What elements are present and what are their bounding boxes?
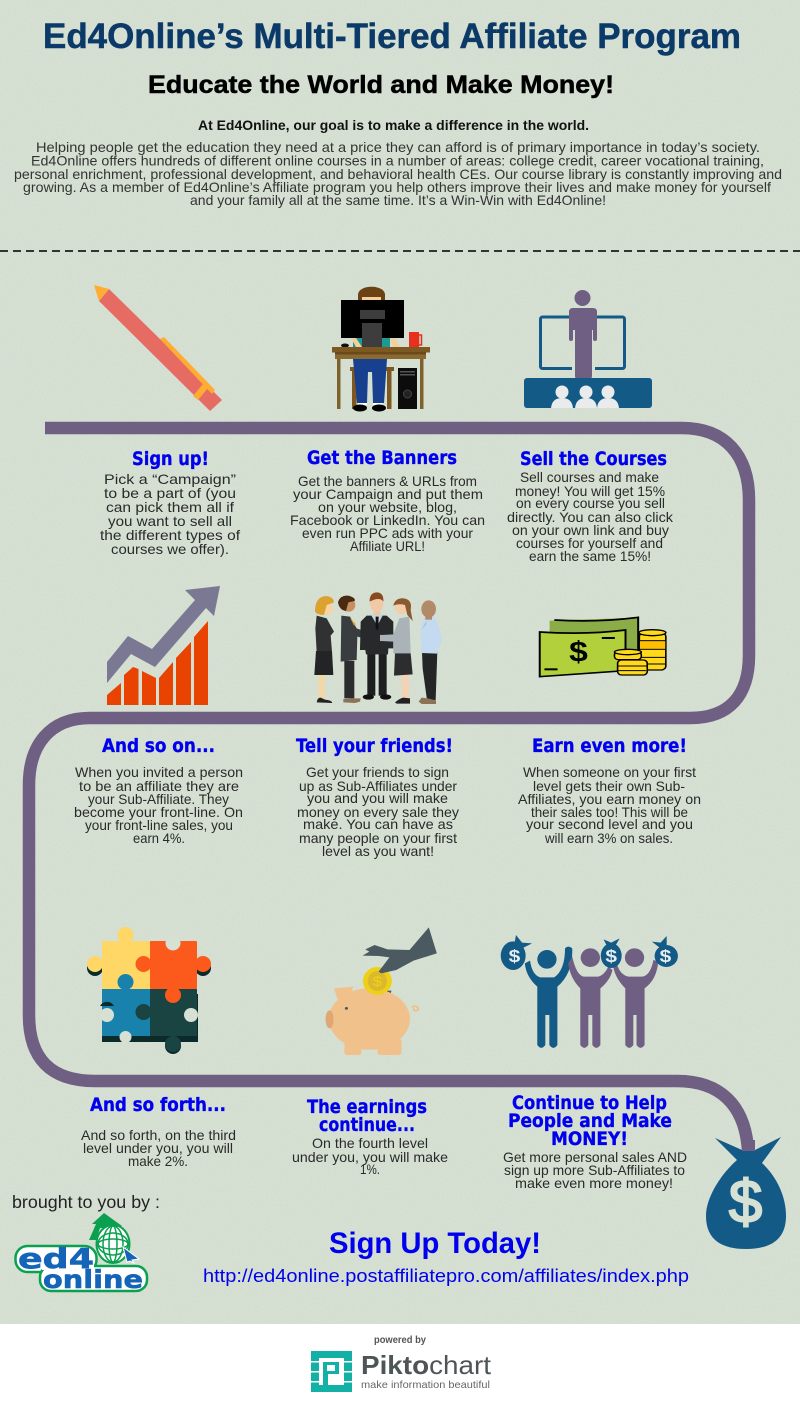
icon: rising bar chart with arrow: [107, 586, 220, 705]
tagline: At Ed4Online, our goal is to make a difference in the world.: [198, 118, 589, 133]
text block: earn even more: will earn 3% on sales.: [544, 830, 673, 846]
icon: piggy bank with coin: [326, 927, 437, 1055]
icon: presenter with audience: [524, 290, 652, 408]
text block: sign up: to be a part of (you: [104, 485, 236, 501]
heading: sign up: Sign up!: [132, 448, 209, 470]
text block: earn even more: their sales too! This will be: [531, 804, 688, 820]
text block: tell your friends: you and you will make: [307, 790, 448, 806]
icon: three people holding money bags: $: [660, 948, 672, 967]
text block: tell your friends: [297, 764, 459, 859]
text block: sell the courses: on every course you sell: [516, 495, 665, 511]
heading: the earnings continue: The earnings: [307, 1096, 427, 1118]
footer: powered by piktochart: [311, 1335, 492, 1392]
text block: continue to help: Get more personal sales AND: [503, 1149, 687, 1165]
icon: three people holding money bags: $: [509, 948, 521, 967]
panel: the earnings continue: [292, 1096, 448, 1177]
icon: puzzle pieces: [87, 927, 211, 1054]
panel: and so on: [74, 735, 243, 846]
text block: continue to help: make even more money!: [515, 1175, 673, 1191]
logo: ed4online: [16, 1213, 147, 1294]
text block: sign up: you want to sell all: [108, 513, 232, 529]
icon: person at desk: [332, 287, 430, 412]
text block: the earnings continue: On the fourth level: [312, 1135, 428, 1151]
text block: sell the courses: earn the same 15%!: [529, 548, 651, 564]
text block: sell the courses: Sell courses and make: [520, 469, 659, 485]
winding path arrow: [29, 428, 749, 1150]
text block: get the banners: [290, 473, 485, 554]
text block: sign up: Pick a “Campaign”: [104, 471, 236, 487]
heading: continue to help: MONEY!: [551, 1128, 628, 1150]
panel: sign up: [100, 448, 240, 557]
icon: piktochart mark: [311, 1351, 352, 1392]
text block: get the banners: even run PPC ads with your: [302, 525, 473, 541]
text block: sign up: the different types of: [100, 527, 240, 543]
text block: and so on: your Sub-Affiliate. They: [88, 791, 229, 807]
heading: earn even more: Earn even more!: [532, 735, 687, 757]
title: Ed4Online’s Multi-Tiered Affiliate Program: [43, 17, 741, 56]
text block: get the banners: Affiliate URL!: [350, 538, 425, 554]
text block: sign up: can pick them all if: [106, 499, 234, 515]
text block: get the banners: Facebook or LinkedIn. You can: [290, 512, 485, 528]
text block: the earnings continue: [292, 1135, 448, 1177]
text block: earn even more: your second level and you: [526, 816, 693, 832]
icon: large money bag: $: [729, 1168, 762, 1235]
panel: continue to help: [503, 1092, 687, 1191]
text block: and so forth: [81, 1127, 236, 1169]
intro paragraph: and your family all at the same time. It’s a Win-Win with Ed4Online!: [190, 192, 606, 208]
heading: the earnings continue: [307, 1096, 427, 1136]
call to action heading: Sign Up Today!: [329, 1227, 541, 1260]
panel: sell the courses: [507, 448, 674, 564]
text block: get the banners: your Campaign and put them: [293, 486, 483, 502]
text: brought to you by: brought to you by :: [12, 1192, 160, 1212]
heading: tell your friends: Tell your friends!: [296, 735, 453, 757]
text block: get the banners: Get the banners & URLs from: [298, 473, 477, 489]
text block: the earnings continue: 1%.: [360, 1161, 380, 1177]
icon: piggy bank with coin: $: [373, 974, 382, 990]
text block: and so on: [74, 764, 243, 846]
text block: sign up: [100, 471, 240, 557]
text block: and so forth: level under you, you will: [83, 1140, 233, 1156]
text block: sell the courses: on your own link and buy: [512, 522, 669, 538]
text block: sell the courses: courses for yourself and: [516, 535, 663, 551]
text block: earn even more: Affiliates, you earn money on: [518, 791, 701, 807]
text block: and so on: become your front-line. On: [74, 804, 243, 820]
text block: and so on: When you invited a person: [75, 764, 243, 780]
text block: sell the courses: money! You will get 15%: [515, 483, 665, 499]
intro paragraph: Ed4Online offers hundreds of different online courses in a number of areas: college credit, career vocational training,: [31, 152, 764, 168]
text block: continue to help: sign up more Sub-Affiliates to: [504, 1162, 685, 1178]
heading: sell the courses: Sell the Courses: [520, 448, 667, 470]
text block: tell your friends: Get your friends to sign: [306, 764, 449, 780]
panel: get the banners: [290, 447, 485, 554]
text block: earn even more: level gets their own Sub-: [533, 778, 685, 794]
footer: powered by piktochart: make information beautiful: [361, 1379, 490, 1391]
panel: earn even more: [518, 735, 701, 846]
text block: sign up: courses we offer).: [111, 541, 229, 557]
logo: ed4online: online: [43, 1265, 143, 1294]
text block: and so on: your front-line sales, you: [85, 817, 233, 833]
footer: powered by piktochart: Piktochart: [361, 1350, 492, 1380]
text block: earn even more: When someone on your first: [523, 764, 696, 780]
heading: continue to help: [508, 1092, 672, 1150]
text block: and so on: earn 4%.: [133, 830, 185, 846]
intro paragraph: Helping people get the education they need at a price they can afford is of primary importance in today’s society.: [36, 139, 760, 155]
text block: tell your friends: up as Sub-Affiliates under: [299, 778, 457, 794]
text block: earn even more: [518, 764, 701, 846]
footer: powered by piktochart: powered by: [374, 1335, 426, 1346]
panel: and so forth: [81, 1094, 236, 1169]
heading: continue to help: Continue to Help: [512, 1092, 667, 1114]
text block: tell your friends: many people on your first: [299, 830, 457, 846]
text block: and so forth: make 2%.: [128, 1153, 188, 1169]
text block: get the banners: on your website, blog,: [318, 499, 457, 515]
intro paragraph: personal enrichment, professional development, and behavioral health CEs. Our course library is constantly improving and: [14, 166, 782, 182]
text block: tell your friends: make. You can have as: [303, 816, 453, 832]
icon: three people holding money bags: $: [605, 948, 617, 967]
intro paragraph: growing. As a member of Ed4Online’s Affiliate program you help others improve their lives and make money for yourself: [23, 179, 771, 195]
logo: ed4online: ed4: [18, 1242, 94, 1275]
text block: tell your friends: money on every sale they: [297, 804, 459, 820]
text block: and so on: to be an affiliate they are: [79, 778, 239, 794]
icon: cash and coins: $: [569, 636, 588, 668]
text block: sell the courses: [507, 469, 674, 564]
text block: the earnings continue: under you, you will make: [292, 1149, 448, 1165]
text block: sell the courses: directly. You can also click: [507, 509, 674, 525]
intro paragraph: [14, 139, 782, 208]
heading: get the banners: Get the Banners: [307, 447, 457, 469]
heading: and so forth: And so forth...: [90, 1094, 226, 1116]
heading: the earnings continue: continue...: [319, 1114, 415, 1136]
heading: continue to help: People and Make: [508, 1110, 672, 1132]
text block: tell your friends: level as you want!: [322, 843, 434, 859]
call to action url: http://ed4online.postaffiliatepro.com/affiliates/index.php: [203, 1265, 689, 1286]
icon: cash and coins: [540, 617, 666, 677]
subtitle: Educate the World and Make Money!: [148, 71, 614, 99]
icon: large money bag: [706, 1137, 786, 1249]
icon: three people holding money bags: [501, 935, 678, 1048]
text block: and so forth: And so forth, on the third: [81, 1127, 236, 1143]
icon: pencil: [94, 285, 222, 411]
text block: continue to help: [503, 1149, 687, 1191]
heading: and so on: And so on...: [102, 735, 215, 757]
panel: tell your friends: [296, 735, 459, 859]
icon: group of business people: [314, 592, 442, 704]
